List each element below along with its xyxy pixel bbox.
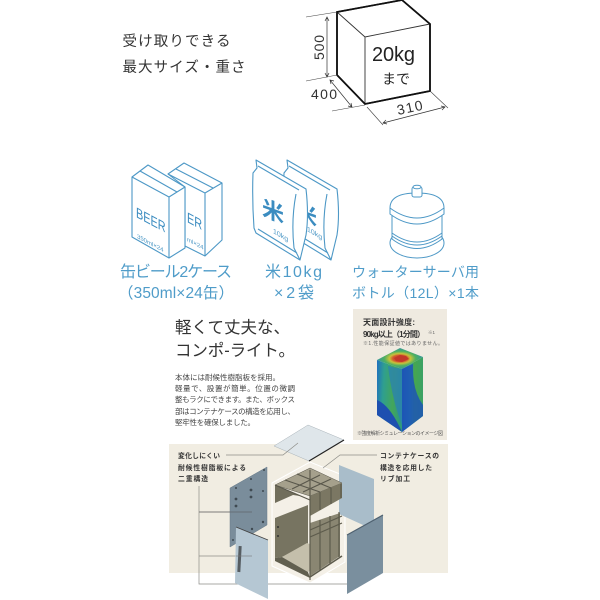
panel: strength simulation: ※1.性能保証値ではありません。 bbox=[363, 340, 443, 347]
labels: rib processing: リブ加工 bbox=[380, 474, 410, 483]
heading: maximum size and weight: 最大サイズ・重さ bbox=[122, 59, 246, 76]
heading: light and strong: コンポ-ライト。 bbox=[175, 341, 295, 360]
label: rice: ×2袋 bbox=[274, 284, 314, 302]
frame hexagon outline bbox=[272, 462, 345, 583]
labels: rib processing: 構造を応用した bbox=[380, 463, 432, 472]
icon: container frame bottom bbox=[275, 470, 342, 580]
body text: 本体には耐候性樹脂板を採用。 bbox=[175, 372, 280, 382]
heading: maximum size and weight: 受け取りできる bbox=[122, 33, 230, 50]
icon: rice bags: 10kg bbox=[273, 227, 288, 244]
label: rice: 米10kg bbox=[265, 263, 322, 281]
labels: double structure: 変化しにくい bbox=[178, 451, 220, 460]
icon: door panel bbox=[235, 527, 268, 599]
icon: top plate bbox=[274, 425, 344, 461]
label: beer cases bbox=[118, 263, 234, 302]
heading: light and strong: 軽くて丈夫な、 bbox=[175, 318, 290, 337]
panel: strength simulation: 天面設計強度: bbox=[363, 317, 415, 327]
icon: beer cases bbox=[132, 163, 222, 258]
icon: back right panel bbox=[339, 465, 374, 530]
panel: strength simulation bbox=[353, 309, 447, 440]
icon: front right panel bbox=[347, 515, 383, 594]
body text: 軽量で、設置が簡単。位置の微調 bbox=[175, 383, 295, 393]
icon: rice bags: 米 bbox=[295, 198, 317, 231]
icon: rice bags: 10kg bbox=[307, 225, 322, 242]
chart: stress heat map cuboid bbox=[377, 348, 423, 432]
icon: rice bags: 米 bbox=[262, 195, 284, 228]
panel: strength simulation: ※1 bbox=[428, 330, 435, 335]
icon: dimension cube: 310 bbox=[395, 97, 424, 118]
icon: dimension cube bbox=[306, 0, 448, 125]
icon: dimension cube: 500 bbox=[311, 35, 327, 60]
icon: dimension cube: 20kg bbox=[372, 44, 415, 66]
panel: beige background bbox=[169, 444, 448, 573]
labels: double structure: 耐候性樹脂板による bbox=[178, 463, 246, 472]
icon: dimension cube: 400 bbox=[311, 86, 337, 102]
leader lines bbox=[199, 443, 377, 584]
labels: rib processing bbox=[380, 452, 439, 483]
body text bbox=[175, 372, 295, 427]
body text: 整もラクにできます。また、ボックス bbox=[175, 394, 295, 404]
icon: beer cases: 350ml×24 bbox=[137, 233, 164, 254]
icon: beer cases: ml×24 bbox=[187, 236, 204, 252]
icon: container frame top bbox=[275, 468, 342, 516]
labels: rib processing: コンテナケースの bbox=[380, 452, 439, 460]
icon: dimension cube: まで bbox=[382, 71, 410, 87]
label: water bottle: ボトル（12L）×1本 bbox=[352, 285, 479, 301]
panel: strength simulation: ※強度解析シミュレーションのイメージ図 bbox=[357, 430, 443, 437]
icon: water bottle bbox=[390, 185, 444, 258]
heading: light and strong bbox=[175, 318, 295, 360]
icon: left side panel bbox=[199, 467, 267, 547]
labels: double structure: 二重構造 bbox=[178, 474, 208, 483]
label: rice bbox=[265, 263, 322, 302]
body text: 堅牢性を確保しました。 bbox=[175, 417, 255, 427]
icon: beer cases: BEER bbox=[136, 204, 166, 236]
icon: beer cases: ER bbox=[187, 209, 202, 233]
labels: double structure bbox=[178, 451, 246, 483]
label: water bottle: ウォーターサーバ用 bbox=[352, 264, 479, 280]
label: beer cases: 缶ビール2ケース bbox=[120, 263, 232, 281]
label: water bottle bbox=[352, 264, 479, 301]
label: beer cases: （350ml×24缶） bbox=[118, 284, 234, 302]
heading: maximum size and weight bbox=[122, 33, 246, 76]
icon: rice bags bbox=[253, 160, 338, 260]
body text: 部はコンテナケースの構造を応用し、 bbox=[175, 406, 295, 416]
panel: strength simulation: 90kg以上（1分間） bbox=[363, 329, 425, 339]
